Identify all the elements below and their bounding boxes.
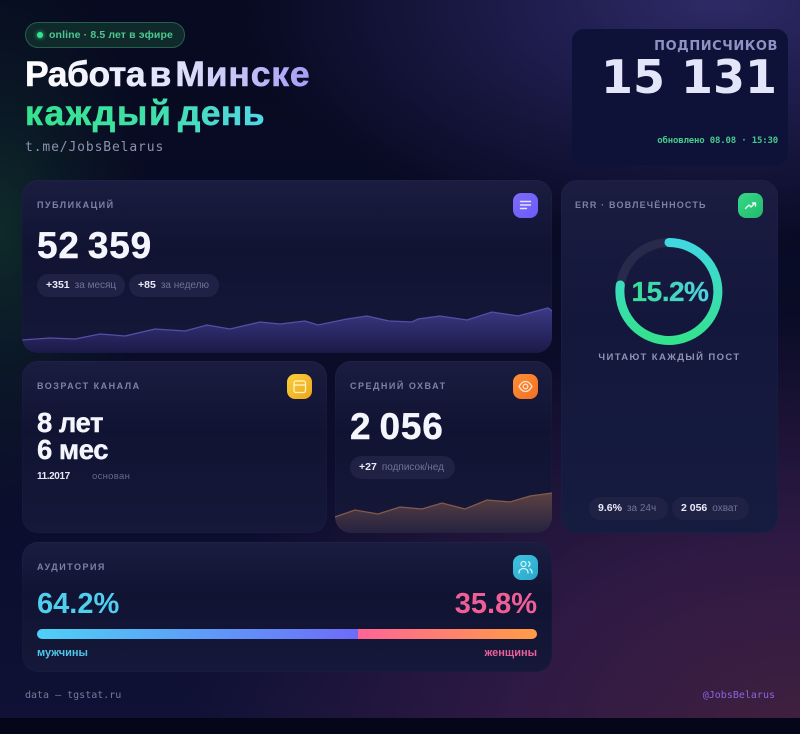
pill: subscriptions xyxy=(350,456,455,479)
icon: eye xyxy=(513,374,538,399)
subscribers value: 15 131 xyxy=(601,50,777,104)
footer handle: @JobsBelarus xyxy=(703,690,775,701)
female segment xyxy=(358,629,537,639)
average reach label: СРЕДНИЙ ОХВАТ xyxy=(350,381,447,391)
status text: online · 8.5 лет в эфире xyxy=(49,29,173,41)
age value xyxy=(37,407,108,465)
founded label: основан xyxy=(92,471,130,482)
pill: 24 hours: 9.6% за 24ч xyxy=(598,502,656,514)
pill: week xyxy=(129,274,219,297)
channel age label: ВОЗРАСТ КАНАЛА xyxy=(37,381,141,391)
male share value: 64.2% xyxy=(37,588,119,620)
update time: обновлено 08.08 · 15:30 xyxy=(657,136,778,146)
ring chart xyxy=(615,238,722,345)
icon: trend arrow xyxy=(738,193,763,218)
male label: мужчины xyxy=(37,647,88,659)
average reach value: 2 056 xyxy=(350,406,444,447)
pill: 24 hours xyxy=(589,497,668,520)
title line 1: Работа в Минске xyxy=(25,54,311,94)
gender share bar xyxy=(37,629,537,639)
publications value: 52 359 xyxy=(37,225,152,266)
panel: channel age xyxy=(22,361,327,533)
status dot xyxy=(37,32,43,38)
panel: audience xyxy=(22,542,552,672)
pill: subscriptions: +27 подписок/нед xyxy=(359,461,444,473)
pill: month: +351 за месяц xyxy=(46,279,116,291)
pill: month xyxy=(37,274,125,297)
engagement value: 15.2% xyxy=(632,276,708,307)
ring caption: ЧИТАЮТ КАЖДЫЙ ПОСТ xyxy=(598,352,741,363)
age value: 8 лет xyxy=(37,407,103,438)
panel: publications xyxy=(22,180,552,353)
icon: calendar xyxy=(287,374,312,399)
female share value: 35.8% xyxy=(455,588,537,620)
publications sparkline xyxy=(22,307,552,353)
channel link: t.me/JobsBelarus xyxy=(25,140,164,155)
panel: subscribers xyxy=(572,29,788,165)
status badge xyxy=(25,22,185,48)
panel: engagement xyxy=(561,180,778,533)
bottom strip xyxy=(0,718,800,734)
male segment xyxy=(37,629,358,639)
subscribers label: ПОДПИСЧИКОВ xyxy=(654,39,778,54)
age value: 6 мес xyxy=(37,434,108,465)
engagement label: ERR · ВОВЛЕЧЁННОСТЬ xyxy=(575,200,707,210)
pill: week: +85 за неделю xyxy=(138,279,209,291)
founded date: 11.2017 xyxy=(37,471,70,482)
reach sparkline xyxy=(335,492,552,533)
pill: reach xyxy=(672,497,749,520)
panel: average reach xyxy=(335,361,552,533)
icon: people xyxy=(513,555,538,580)
pill: reach: 2 056 охват xyxy=(681,502,738,514)
icon: document lines xyxy=(513,193,538,218)
female label: женщины xyxy=(484,647,537,659)
footer source: data — tgstat.ru xyxy=(25,690,121,701)
publications label: ПУБЛИКАЦИЙ xyxy=(37,200,115,210)
audience label: АУДИТОРИЯ xyxy=(37,562,106,572)
